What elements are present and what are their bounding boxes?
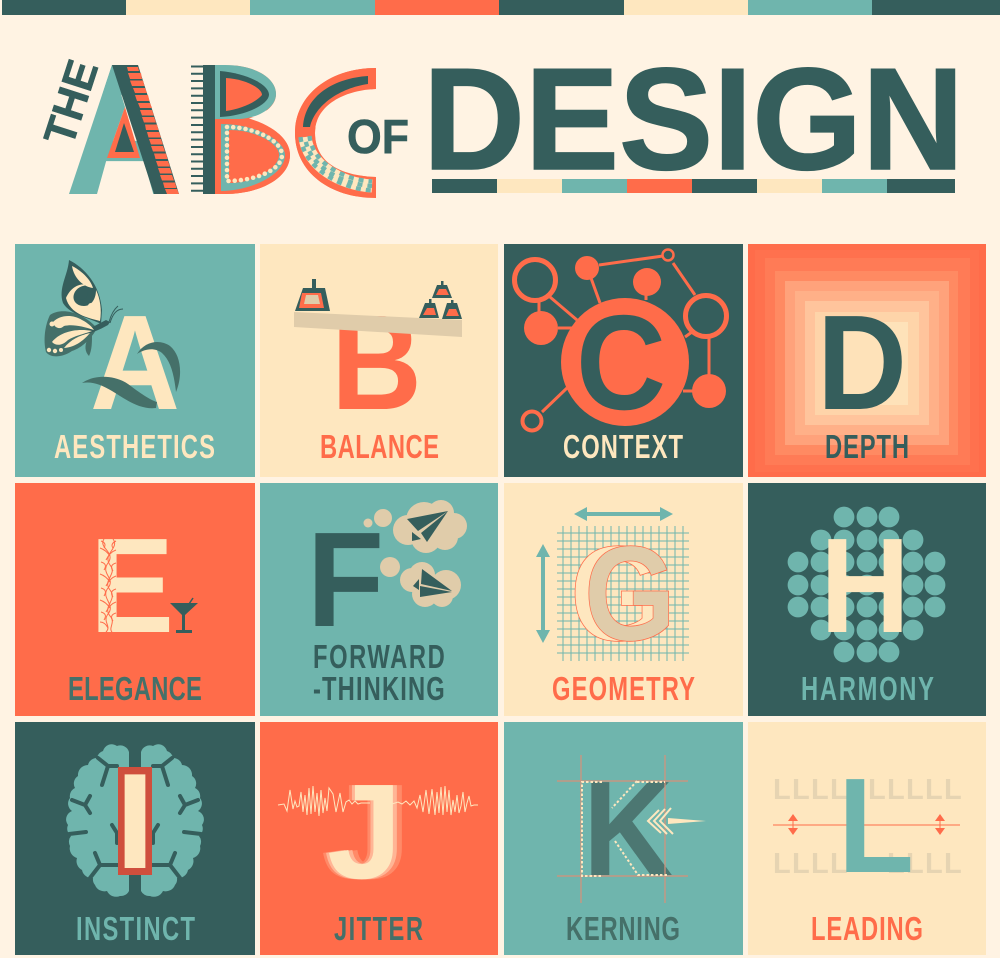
label: forward-thinking: FORWARD (313, 639, 445, 676)
background small L rows: L (944, 774, 962, 806)
panel: L leading (748, 722, 986, 955)
panel: H harmony (748, 483, 986, 716)
big letter E: E (90, 510, 174, 661)
big letter J layered: J (327, 756, 402, 907)
panel: K kerning (504, 722, 743, 955)
big letter K: K (583, 753, 673, 904)
label: instinct: INSTINCT (76, 911, 195, 948)
baseline rule (773, 824, 960, 826)
big letter D: D (817, 287, 907, 438)
label: elegance: ELEGANCE (68, 671, 202, 708)
icon: paper plane upper (407, 511, 448, 542)
big letter H: H (820, 510, 910, 661)
background small L rows: L (906, 774, 924, 806)
label: depth: DEPTH (825, 429, 909, 466)
panel: E elegance (15, 483, 255, 716)
icon: tilted plank (294, 312, 462, 337)
background small L rows: L (925, 848, 943, 880)
dotted kerning outline (582, 781, 667, 876)
background small L rows: L (773, 774, 791, 806)
icon: small weights (419, 281, 462, 319)
background small L rows: L (925, 774, 943, 806)
swirl ribbon (82, 342, 180, 408)
decorated letter C (295, 68, 376, 198)
background small L rows: L (792, 774, 810, 806)
big letter J layered: J (336, 756, 411, 907)
big letter J layered: J (331, 756, 406, 907)
title word: DESIGN: DESIGN (423, 38, 964, 200)
title word: OF: OF (347, 111, 409, 164)
label: kerning: KERNING (566, 911, 680, 948)
big letter B: B (331, 287, 422, 438)
arrow: kerning (648, 808, 706, 834)
arrow: leading left (788, 814, 798, 835)
background small L rows: L (830, 848, 848, 880)
background small L rows: L (887, 848, 905, 880)
icon: butterfly (45, 260, 123, 356)
arrow: leading right (935, 814, 945, 835)
background small L rows: L (944, 848, 962, 880)
background small L rows: L (887, 774, 905, 806)
big letter F: F (307, 504, 384, 655)
background small L rows: L (811, 848, 829, 880)
decorated letter A (69, 65, 179, 194)
big letter I: I (115, 745, 155, 897)
panel: C context (504, 244, 743, 477)
icon: thought cloud lower (380, 557, 461, 607)
letter ornament (100, 539, 116, 632)
label: forward-thinking: -THINKING (313, 671, 445, 708)
big letter I frame (118, 767, 152, 875)
label: aesthetics: AESTHETICS (54, 429, 215, 466)
panel: J jitter (260, 722, 498, 955)
arrow: vertical (536, 544, 550, 643)
label: leading: LEADING (811, 911, 923, 948)
panel: A aesthetics (15, 244, 255, 477)
background small L rows: L (906, 848, 924, 880)
big letter A: A (90, 287, 180, 438)
decorated letter B (191, 65, 290, 194)
background small L rows: L (773, 848, 791, 880)
decorated letter B: B (200, 25, 300, 234)
icon: thought cloud upper (364, 500, 467, 553)
icon: network (514, 250, 726, 430)
construction grid (557, 526, 689, 661)
background small L rows: L (830, 774, 848, 806)
decorated letter A: A (69, 25, 179, 234)
big letter J layered: J (321, 756, 396, 907)
arrow: horizontal (574, 507, 673, 521)
big letter J layered: J (324, 756, 399, 907)
label: balance: BALANCE (320, 429, 439, 466)
label: jitter: JITTER (334, 911, 423, 948)
background small L rows: L (811, 774, 829, 806)
panel: B balance (260, 244, 498, 477)
icon: cocktail glass (170, 598, 198, 633)
big letter G: G (584, 518, 676, 669)
label: harmony: HARMONY (801, 671, 934, 708)
title underline bar (432, 179, 955, 193)
big letter L: L (838, 750, 914, 901)
big letter G shadow: G (570, 518, 666, 669)
decorated letter C: C (282, 26, 417, 235)
top colour bar (2, 0, 1000, 15)
panel: I instinct (15, 722, 255, 955)
panel: D depth (748, 244, 986, 477)
dot cluster (788, 507, 945, 662)
concentric squares (755, 250, 979, 472)
icon: paper plane lower (413, 569, 452, 597)
label: geometry: GEOMETRY (552, 671, 695, 708)
title (43, 58, 956, 198)
background small L rows: L (868, 774, 886, 806)
label: forward-thinking (313, 639, 445, 708)
icon: brain (66, 744, 204, 897)
label: context: CONTEXT (563, 429, 683, 466)
panel: F forward-thinking (260, 483, 498, 716)
guide lines (557, 755, 688, 903)
jitter waveform (278, 786, 478, 816)
big letter C: C (576, 287, 666, 438)
background small L rows: L (792, 848, 810, 880)
title word: THE: THE (35, 54, 108, 151)
panel: G geometry (504, 483, 743, 716)
icon: large weight (295, 279, 330, 311)
background small L rows (773, 774, 962, 880)
